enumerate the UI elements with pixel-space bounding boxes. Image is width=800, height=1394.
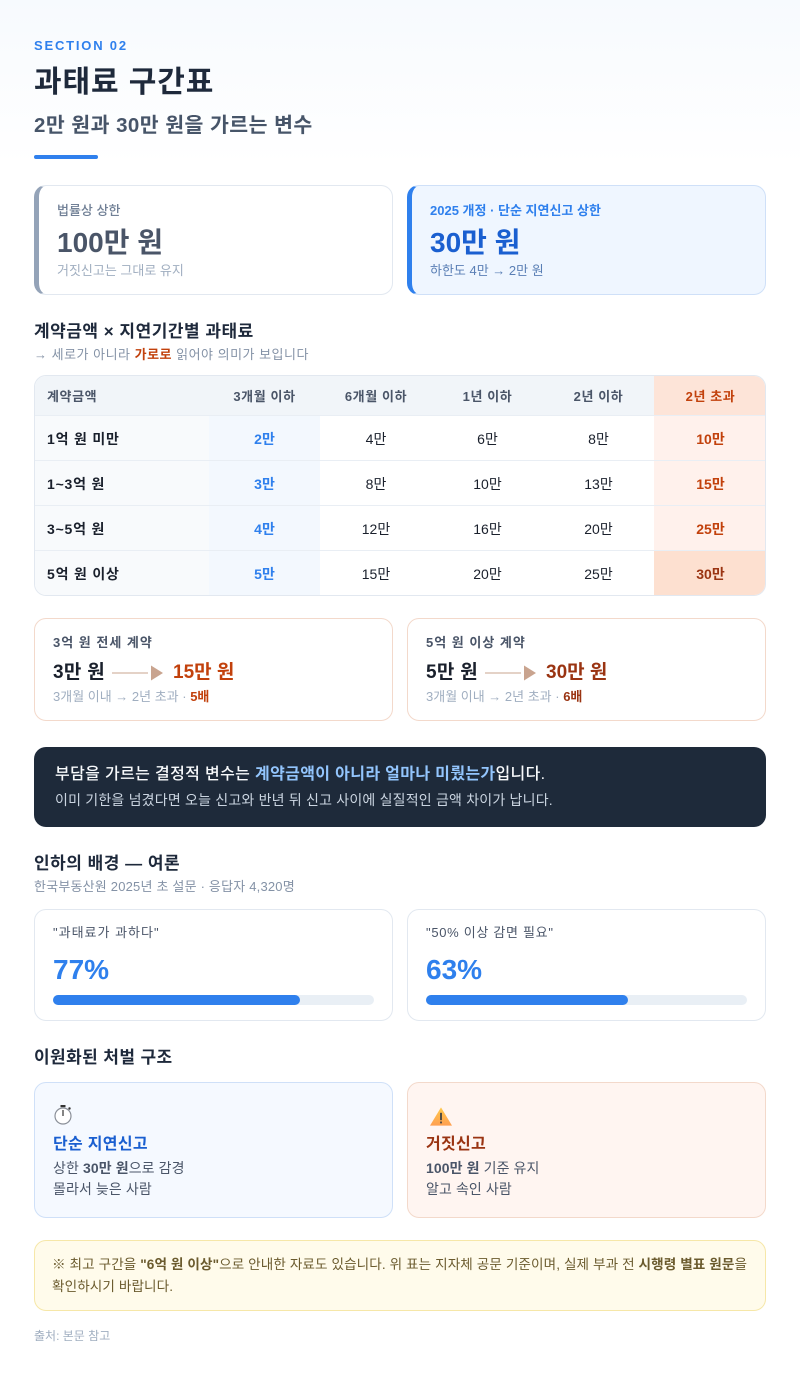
from value: 3만 원 <box>53 662 105 683</box>
heading: table: 계약금액 × 지연기간별 과태료 <box>34 322 254 341</box>
title: 과태료 구간표 <box>34 66 214 99</box>
row: 500M and over: 15만 <box>362 566 390 582</box>
icon: stopwatch <box>54 1105 72 1125</box>
progress bar <box>426 995 747 1005</box>
panel: 300M lease example <box>34 618 393 721</box>
heading: background: 인하의 배경 — 여론 <box>34 854 180 873</box>
row: 500M and over: 5억 원 이상 <box>47 566 120 582</box>
label: 2025 개정 · 단순 지연신고 상한 <box>430 203 601 218</box>
note: 거짓신고는 그대로 유지 <box>57 263 184 278</box>
row: 300-500M <box>35 505 767 550</box>
row: 300-500M: 3~5억 원 <box>47 521 105 537</box>
row: under 100M: 2만 <box>254 431 275 447</box>
row: 300-500M: 16만 <box>473 521 502 537</box>
note text: 확인하시기 바랍니다. <box>52 1278 173 1294</box>
note text: ※ 최고 구간을 "6억 원 이상"으로 안내한 자료도 있습니다. 위 표는 지자체 공문 기준이며, 실제 부과 전 시행령 별표 원문을 <box>52 1257 747 1272</box>
row: 100-300M: 13만 <box>584 476 613 492</box>
to value: 15만 원 <box>173 662 234 683</box>
value: 30만 원 <box>430 227 520 258</box>
section label: SECTION 02 <box>34 38 128 53</box>
row: 300-500M: 12만 <box>362 521 390 537</box>
header row: 1년 이하 <box>463 389 512 404</box>
type title: 단순 지연신고 <box>53 1136 148 1153</box>
panel: survey 77% <box>34 909 393 1021</box>
header row: 계약금액 <box>47 389 97 404</box>
heading: dual penalty: 이원화된 처벌 구조 <box>34 1048 173 1067</box>
to value: 30만 원 <box>546 662 607 683</box>
row: 500M and over: 30만 <box>696 566 725 582</box>
label: 법률상 상한 <box>57 203 120 218</box>
row: 100-300M: 10만 <box>473 476 502 492</box>
header row <box>35 376 767 415</box>
detail: 100만 원 기준 유지 <box>426 1160 540 1176</box>
row: 300-500M: 20만 <box>584 521 613 537</box>
panel: false report <box>407 1082 766 1218</box>
who: 알고 속인 사람 <box>426 1181 512 1197</box>
who: 몰라서 늦은 사람 <box>53 1181 152 1197</box>
row: 500M and over <box>35 550 767 595</box>
note: 하한도 4만 → 2만 원 <box>430 263 544 278</box>
row: under 100M: 10만 <box>696 431 725 447</box>
panel: simple late report <box>34 1082 393 1218</box>
panel: survey 63% <box>407 909 766 1021</box>
row: 500M and over: 5만 <box>254 566 275 582</box>
question: "50% 이상 감면 필요" <box>426 925 554 940</box>
value: 100만 원 <box>57 227 163 258</box>
question: "과태료가 과하다" <box>53 925 160 940</box>
arrow <box>112 666 163 680</box>
subtitle: 2만 원과 30만 원을 가르는 변수 <box>34 114 313 137</box>
header row: 2년 이하 <box>574 389 623 404</box>
header row: 2년 초과 <box>686 389 735 404</box>
row: 300-500M: 25만 <box>696 521 725 537</box>
row: under 100M: 4만 <box>366 431 386 447</box>
label: 5억 원 이상 계약 <box>426 635 526 650</box>
row: under 100M <box>35 415 767 460</box>
row: under 100M: 1억 원 미만 <box>47 431 120 447</box>
row: 100-300M: 8만 <box>366 476 386 492</box>
row: 100-300M: 15만 <box>696 476 725 492</box>
row: 500M and over: 20만 <box>473 566 502 582</box>
survey note: 한국부동산원 2025년 초 설문 · 응답자 4,320명 <box>34 879 295 894</box>
percent: 63% <box>426 954 482 985</box>
row: 300-500M: 4만 <box>254 521 275 537</box>
row: under 100M: 8만 <box>588 431 609 447</box>
source: 출처: 본문 참고 <box>34 1329 110 1343</box>
accent bar <box>34 155 98 159</box>
row: 100-300M: 3만 <box>254 476 275 492</box>
note box <box>34 1240 766 1311</box>
row: 100-300M: 1~3억 원 <box>47 476 105 492</box>
type title: 거짓신고 <box>426 1136 486 1153</box>
from value: 5만 원 <box>426 662 478 683</box>
callout: deciding factor <box>34 747 766 827</box>
note: 3개월 이내 → 2년 초과 · 6배 <box>426 689 582 704</box>
header row: 6개월 이하 <box>345 389 407 404</box>
callout headline: 부담을 가르는 결정적 변수는 계약금액이 아니라 얼마나 미뤘는가입니다. <box>55 766 545 783</box>
header background <box>0 0 800 165</box>
panel: 500M contract example <box>407 618 766 721</box>
note text <box>52 1257 747 1294</box>
row: 500M and over: 25만 <box>584 566 613 582</box>
detail: 상한 30만 원으로 감경 <box>53 1160 185 1176</box>
panel: 2025 revision limit <box>407 185 766 295</box>
row: under 100M: 6만 <box>477 431 498 447</box>
percent: 77% <box>53 954 109 985</box>
note: 3개월 이내 → 2년 초과 · 5배 <box>53 689 209 704</box>
progress bar <box>53 995 374 1005</box>
panel: statutory limit <box>34 185 393 295</box>
arrow <box>485 666 536 680</box>
row: 100-300M <box>35 460 767 505</box>
icon: warning <box>430 1108 452 1126</box>
header row: 3개월 이하 <box>233 389 296 404</box>
callout body: 이미 기한을 넘겼다면 오늘 신고와 반년 뒤 신고 사이에 실질적인 금액 차이가 납니다. <box>55 792 553 808</box>
table: fines <box>34 375 766 596</box>
label: 3억 원 전세 계약 <box>53 635 153 650</box>
table note: → 세로가 아니라 가로로 읽어야 의미가 보입니다 <box>34 347 309 362</box>
